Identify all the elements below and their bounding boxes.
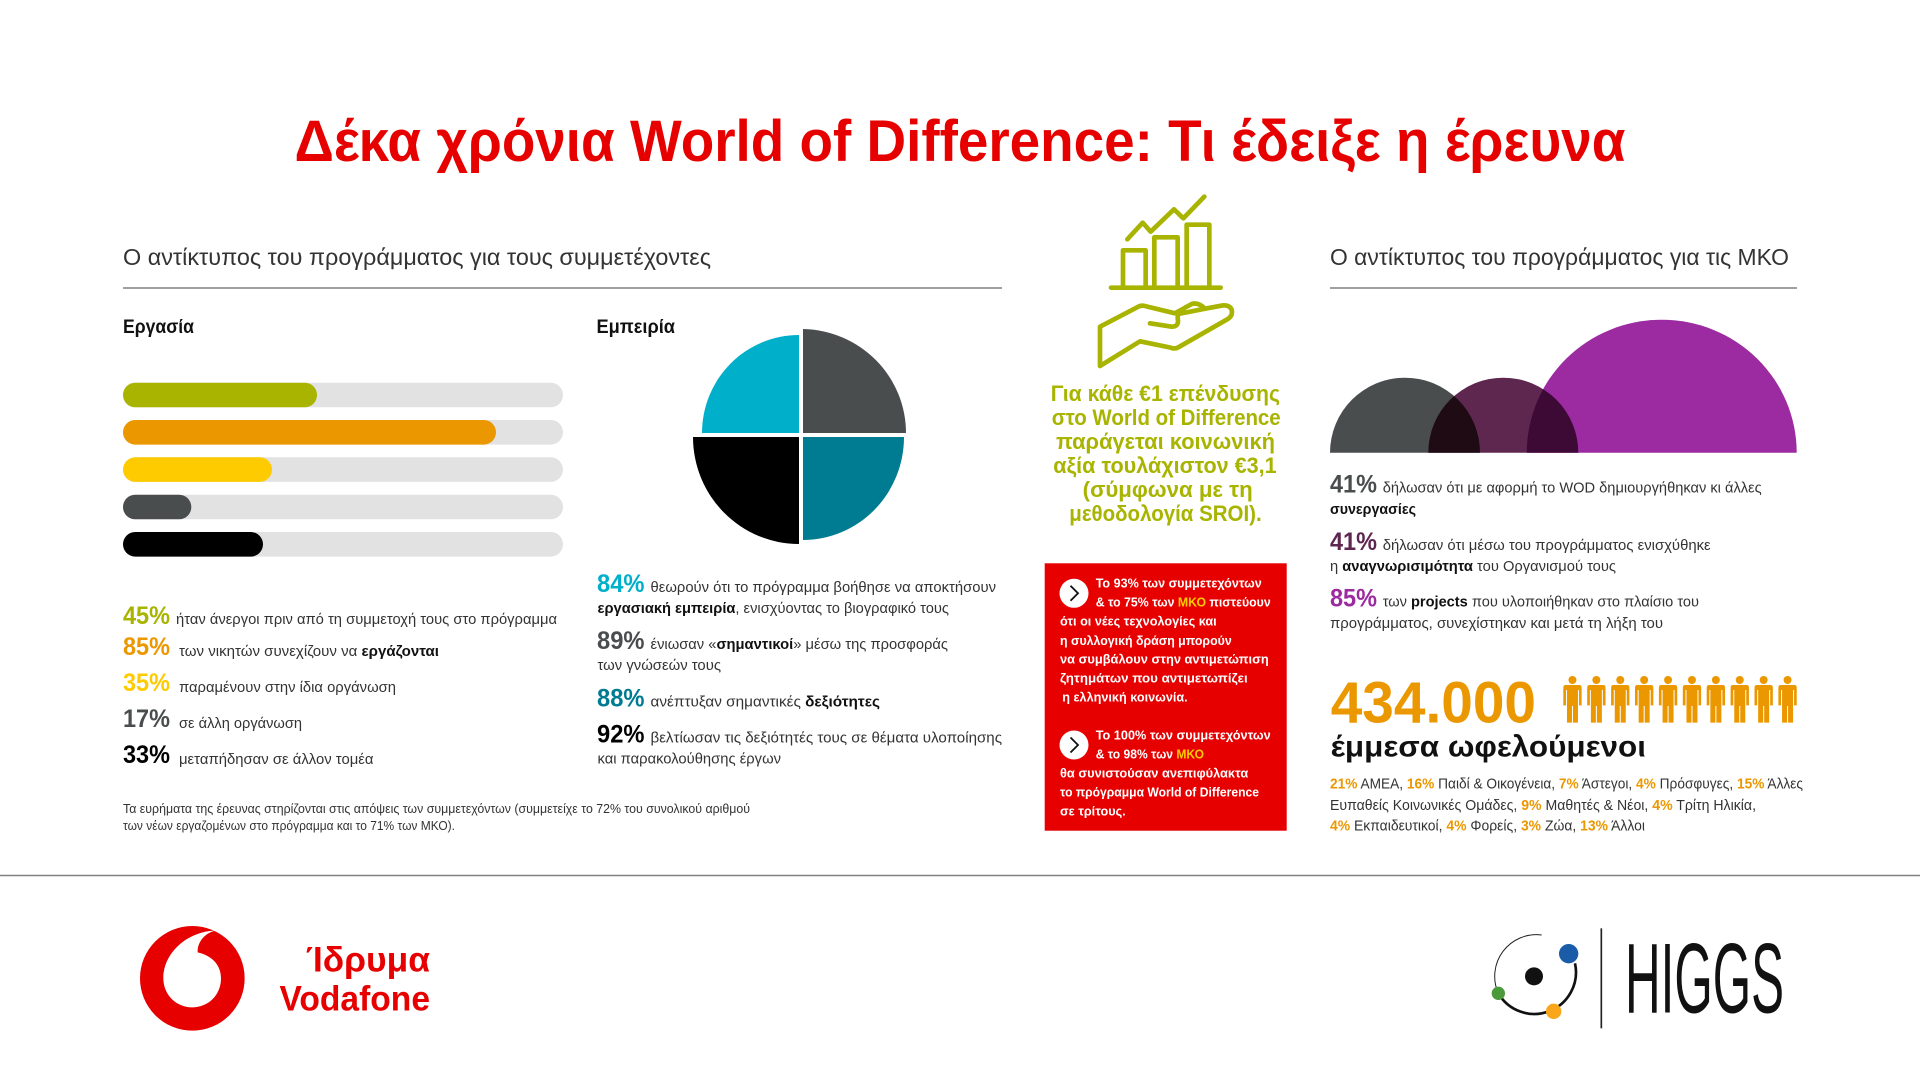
stats: experience: 88%	[597, 684, 644, 712]
text block: technologies: να συμβάλουν στην αντιμετώπιση	[1060, 652, 1269, 667]
stats: experience: και παρακολούθησης έργων	[598, 750, 781, 768]
footnote: Τα ευρήματα της έρευνας στηρίζονται στις απόψεις των συμμετεχόντων (συμμετείχε το 72% του συνολικού αριθμού	[123, 802, 750, 816]
icon: row of people	[1563, 676, 1797, 723]
stats: NGOs: συνεργασίες	[1330, 501, 1416, 518]
stats: NGOs: δήλωσαν ότι με αφορμή το WOD δημιουργήθηκαν κι άλλες	[1383, 480, 1762, 497]
stats: work: 35%	[123, 669, 170, 697]
text block: technologies: & το 75% των ΜΚΟ πιστεύουν	[1096, 595, 1271, 610]
panel: social return	[1045, 197, 1287, 831]
callout: SROI: (σύμφωνα με τη	[1083, 477, 1253, 502]
stats: NGOs: η αναγνωρισιμότητα του Οργανισμού τους	[1330, 558, 1616, 575]
stats: work: παραμένουν στην ίδια οργάνωση	[179, 679, 396, 696]
stats: work: μεταπήδησαν σε άλλον τομέα	[179, 751, 374, 768]
stats: NGOs: 41%	[1330, 470, 1377, 498]
callout: SROI	[1051, 381, 1281, 526]
text: foundation name: Vodafone	[280, 980, 430, 1019]
icon: orbit	[1492, 928, 1602, 1028]
stats: NGOs: δήλωσαν ότι μέσω του προγράμματος ενισχύθηκε	[1383, 537, 1711, 554]
stats: NGOs: 85%	[1330, 584, 1377, 612]
subheading: work: Εργασία	[123, 317, 194, 338]
text block: recommend: & το 98% των ΜΚΟ	[1096, 746, 1204, 761]
stats: work: 85%	[123, 633, 170, 661]
stats: experience	[597, 570, 1002, 768]
text: foundation name: Ίδρυμα	[306, 941, 430, 980]
text block: technologies: Το 93% των συμμετεχόντων	[1096, 576, 1262, 591]
text block: technologies: ότι οι νέες τεχνολογίες και	[1060, 614, 1217, 629]
stats: experience: βελτίωσαν τις δεξιότητές τους σε θέματα υλοποίησης	[650, 730, 1002, 746]
text block: beneficiary breakdown: Ευπαθείς Κοινωνικές Ομάδες, 9% Μαθητές & Νέοι, 4% Τρίτη Ηλικία,	[1330, 797, 1756, 814]
stats: work: των νικητών συνεχίζουν να εργάζονται	[179, 643, 439, 660]
icon: hand with growing chart	[1100, 197, 1232, 366]
text: foundation name	[280, 941, 430, 1019]
subheading: indirect beneficiaries: έμμεσα ωφελούμενοι	[1331, 731, 1646, 764]
icon: chevron circle 1	[1060, 579, 1088, 608]
callout: SROI: στο World of Difference	[1052, 405, 1281, 430]
text block: recommend: σε τρίτους.	[1060, 804, 1126, 819]
logo: Vodafone Foundation	[140, 926, 430, 1031]
big number: beneficiaries: 434.000	[1331, 671, 1536, 736]
stats: experience: 84%	[597, 570, 644, 598]
chart: overlapping semicircles	[1330, 320, 1797, 453]
callout: SROI: μεθοδολογία SROI).	[1069, 501, 1262, 526]
footnote	[123, 802, 750, 833]
stats: experience: ανέπτυξαν σημαντικές δεξιότητες	[650, 694, 880, 710]
icon: chevron circle 2	[1060, 730, 1088, 760]
subheading: experience: Εμπειρία	[596, 317, 675, 338]
stats: NGOs	[1330, 470, 1762, 632]
text block: technologies	[1060, 576, 1271, 705]
stats: experience: 92%	[597, 720, 644, 748]
text block: recommend: το πρόγραμμα World of Difference	[1060, 785, 1259, 800]
text block: technologies: η συλλογική δράση μπορούν	[1060, 633, 1232, 648]
panel: impact on NGOs	[1330, 244, 1803, 835]
callout: SROI: αξία τουλάχιστον €3,1	[1053, 453, 1277, 478]
icon: Vodafone speechmark	[140, 926, 245, 1031]
stats: NGOs: προγράμματος, συνεχίστηκαν και μετά τη λήξη του	[1330, 615, 1663, 632]
panel: impact on participants	[123, 244, 1002, 833]
stats: work: σε άλλη οργάνωση	[179, 715, 302, 732]
stats: experience: των γνώσεών τους	[598, 657, 721, 674]
stats: work: 45%	[123, 602, 170, 630]
text block: recommend: Το 100% των συμμετεχόντων	[1096, 728, 1271, 743]
callout: SROI: παράγεται κοινωνική	[1056, 429, 1275, 454]
stats: experience: ένιωσαν «σημαντικοί» μέσω της προσφοράς	[650, 636, 948, 653]
stats: NGOs: 41%	[1330, 528, 1377, 556]
stats: work: 33%	[123, 741, 170, 769]
logo: HIGGS	[1492, 923, 1784, 1034]
text block: beneficiary breakdown: 21% ΑΜΕΑ, 16% Παιδί & Οικογένεια, 7% Άστεγοι, 4% Πρόσφυγες, 15% Άλλες	[1330, 775, 1803, 792]
text block: recommend	[1060, 728, 1271, 819]
heading: NGOs: Ο αντίκτυπος του προγράμματος για τις ΜΚΟ	[1330, 244, 1789, 270]
text block: technologies: ζητημάτων που αντιμετωπίζει	[1060, 671, 1248, 686]
stats: work: ήταν άνεργοι πριν από τη συμμετοχή τους στο πρόγραμμα	[176, 611, 557, 628]
stats: NGOs: των projects που υλοποιήθηκαν στο πλαίσιο του	[1383, 593, 1699, 610]
heading: participants: Ο αντίκτυπος του προγράμματος για τους συμμετέχοντες	[123, 244, 711, 270]
footnote: των νέων εργαζομένων στο πρόγραμμα και το 71% των ΜΚΟ).	[123, 819, 455, 833]
callout: SROI: Για κάθε €1 επένδυσης	[1051, 381, 1280, 406]
stats: experience: εργασιακή εμπειρία, ενισχύοντας το βιογραφικό τους	[598, 600, 949, 617]
stats: work: 17%	[123, 705, 170, 733]
panel: red callout box	[1045, 563, 1287, 831]
pie chart: experience	[693, 329, 906, 544]
text block: technologies: η ελληνική κοινωνία.	[1062, 690, 1188, 705]
stats: experience: θεωρούν ότι το πρόγραμμα βοήθησε να αποκτήσουν	[650, 579, 996, 596]
stats: experience: 89%	[597, 627, 644, 655]
text block: recommend: θα συνιστούσαν ανεπιφύλακτα	[1060, 766, 1248, 781]
text block: beneficiary breakdown: 4% Εκπαιδευτικοί, 4% Φορείς, 3% Ζώα, 13% Άλλοι	[1330, 818, 1645, 835]
bar chart: work outcomes	[123, 383, 563, 557]
stats: work	[123, 602, 557, 769]
title: Δέκα χρόνια World of Difference: Τι έδειξε η έρευνα	[294, 109, 1626, 174]
text block: beneficiary breakdown	[1330, 775, 1803, 835]
